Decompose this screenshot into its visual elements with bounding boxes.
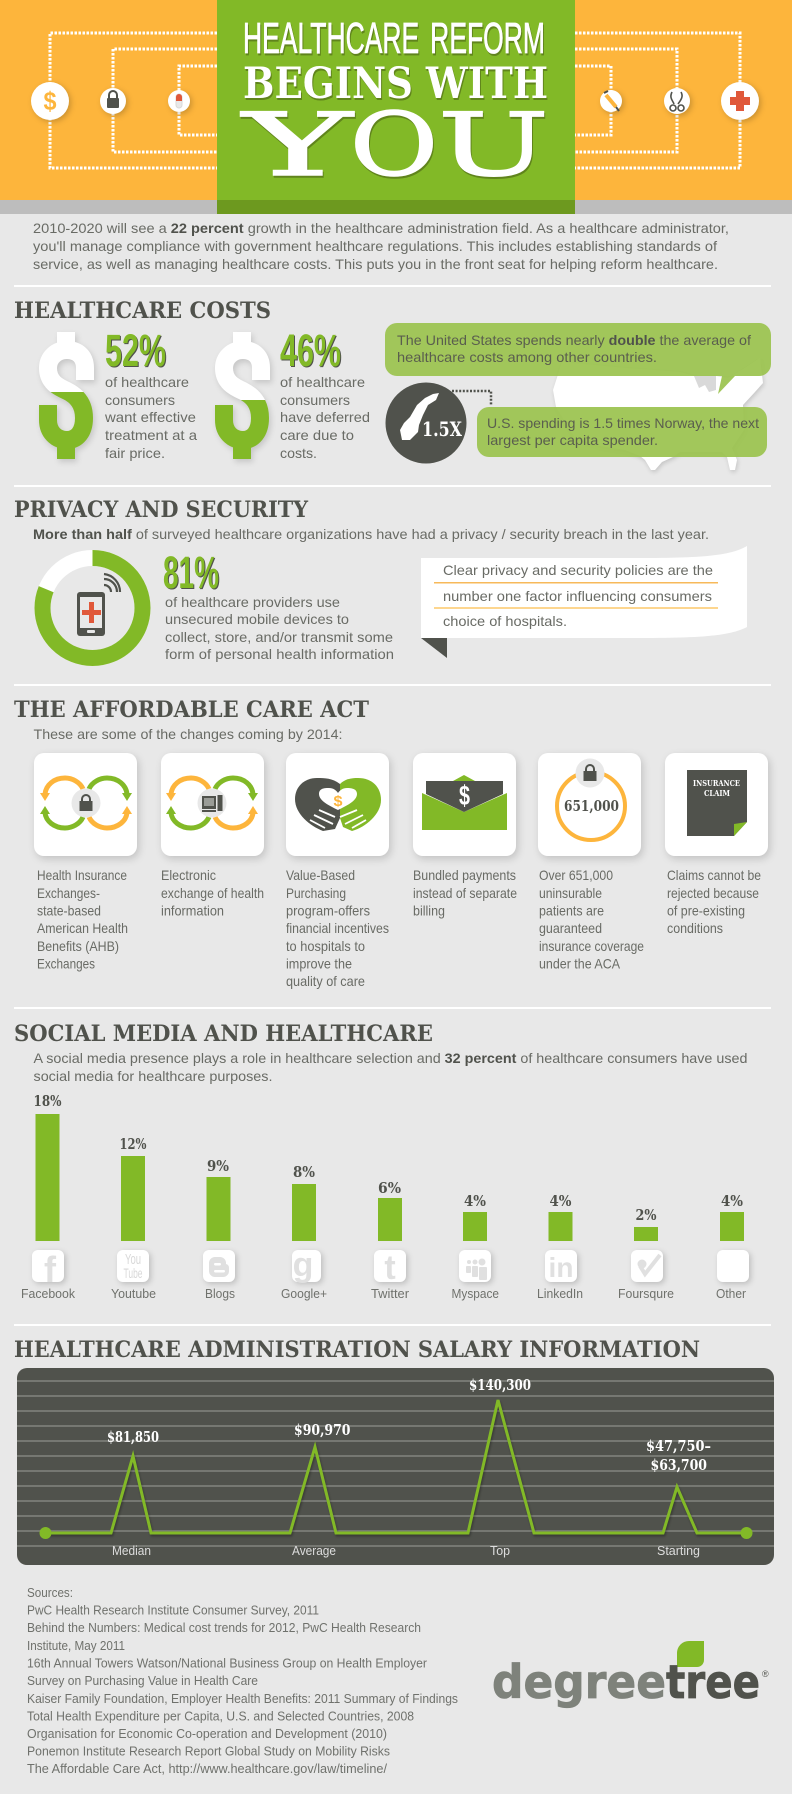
bar chart: social media use: 6% [378, 1179, 401, 1197]
card: health insurance exchanges: Benefits (AHB) [37, 938, 119, 954]
card: electronic exchange: information [161, 902, 224, 918]
card: health insurance exchanges: state-based [37, 902, 101, 918]
icon: facebook: Facebook [21, 1287, 76, 1301]
card: value-based purchasing: improve the [286, 956, 352, 972]
icon: youtube [111, 1250, 156, 1301]
logo: degreetree: ® [762, 1669, 769, 1679]
icon: google plus: Google+ [281, 1287, 327, 1301]
icon: facebook: f [44, 1249, 57, 1290]
icon: lock pin [100, 88, 126, 114]
line chart: salary: Starting [657, 1544, 700, 1558]
title [241, 14, 549, 196]
stat: 52 percent: treatment at a [105, 427, 197, 443]
sources: Institute, May 2011 [27, 1639, 125, 1653]
card: insurance claim: Claims cannot be [667, 867, 761, 883]
intro paragraph: 2010-2020 will see a 22 percent growth in the healthcare administration field. As a healthcare administrator, [33, 220, 729, 236]
heading: the affordable care act: THE AFFORDABLE CARE ACT [14, 697, 370, 723]
icon: norway 1.5x: 1.5X [422, 417, 462, 441]
stat: 81 percent [163, 547, 394, 662]
stat: 46 percent: 46% [280, 325, 341, 376]
sources: 16th Annual Towers Watson/National Business Group on Health Employer [27, 1656, 427, 1670]
intro paragraph: you'll manage compliance with government healthcare regulations. This includes establishing standards of [33, 238, 717, 254]
stat: 81 percent: of healthcare providers use [165, 594, 340, 610]
title: BEGINS WITH [243, 59, 548, 109]
stat: 46 percent: have deferred [280, 409, 370, 425]
card: 651,000 patients: insurance coverage [539, 938, 644, 954]
card: electronic exchange: exchange of health [161, 885, 264, 901]
dotted connector: norway [452, 391, 491, 405]
title: HEALTHCARE REFORM [243, 14, 545, 63]
title: O [350, 94, 438, 196]
intro paragraph: service, as well as managing healthcare costs. This puts you in the front seat for helping reform healthcare. [33, 256, 718, 272]
icon: syringe pin [600, 90, 622, 112]
card: electronic exchange: Electronic [161, 867, 216, 883]
ribbon callout: Clear privacy and security policies are the [443, 562, 713, 578]
icon: medical cross pin [721, 82, 759, 120]
callout: norway: largest per capita spender. [487, 432, 658, 448]
icon: myspace [452, 1250, 499, 1301]
icon: google plus: g [293, 1246, 313, 1284]
card: insurance claim: CLAIM [704, 788, 730, 798]
bar chart: social media use: 8% [293, 1163, 315, 1181]
callout: double the average: The United States spends nearly double the average of [397, 332, 751, 348]
heading: salary information: HEALTHCARE ADMINISTRATION SALARY INFORMATION [14, 1337, 700, 1363]
icon: twitter: Twitter [371, 1287, 409, 1301]
stat: 52 percent [104, 325, 197, 461]
card: bundled payments: Bundled payments [413, 867, 516, 883]
logo: degreetree: tree [666, 1655, 760, 1709]
ribbon callout: number one factor influencing consumers [443, 588, 712, 604]
intro paragraph [33, 220, 729, 272]
icon: youtube: Tube [124, 1265, 143, 1281]
icon: youtube: Youtube [111, 1287, 156, 1301]
heading: healthcare costs: HEALTHCARE COSTS [14, 298, 271, 324]
sources: The Affordable Care Act, http://www.healthcare.gov/law/timeline/ [27, 1762, 388, 1776]
card: insurance claim: conditions [667, 920, 723, 936]
card: 651,000 patients: uninsurable [539, 885, 602, 901]
stat: 52 percent: of healthcare [105, 374, 189, 390]
icon: norway 1.5x [386, 382, 466, 464]
card: 651,000 patients: guaranteed [539, 920, 602, 936]
dotted connector lines [50, 33, 740, 168]
card: health insurance exchanges: Exchanges [37, 956, 95, 972]
card: value-based purchasing: to hospitals to [286, 938, 365, 954]
stat: 81 percent: collect, store, and/or transmit some [165, 629, 393, 645]
icon: other: Other [716, 1287, 746, 1301]
social media intro: social media for healthcare purposes. [34, 1068, 272, 1084]
card: value-based purchasing: program-offers [286, 902, 370, 918]
card: health insurance exchanges: American Health [37, 920, 128, 936]
ribbon callout [421, 546, 747, 658]
card: 651,000 patients: under the ACA [539, 956, 621, 972]
stat: 46 percent: consumers [280, 392, 350, 408]
card: bundled payments: billing [413, 902, 445, 918]
icon: foursquare [618, 1250, 674, 1301]
icon: foursquare: Foursqure [618, 1287, 674, 1301]
stat: 46 percent: of healthcare [280, 374, 365, 390]
icon: myspace: Myspace [452, 1287, 499, 1301]
icon: facebook [21, 1249, 76, 1301]
card: 651,000 patients [538, 753, 644, 972]
logo: degreetree: degree [492, 1655, 666, 1709]
card: health insurance exchanges: Health Insurance [37, 867, 127, 883]
card: health insurance exchanges: Exchanges- [37, 885, 100, 901]
icon: dollar 52 percent [48, 332, 85, 459]
sources: Ponemon Institute Research Report Global Study on Mobility Risks [27, 1744, 390, 1758]
stat: 46 percent [280, 325, 370, 461]
callout: norway: U.S. spending is 1.5 times Norway, the next [487, 415, 759, 431]
card: insurance claim [665, 753, 768, 936]
line chart: salary: $63,700 [650, 1456, 707, 1474]
icon: linkedin: in [549, 1252, 573, 1283]
icon: youtube: You [125, 1251, 141, 1268]
icon: twitter: t [384, 1249, 396, 1287]
card: value-based purchasing: Purchasing [286, 885, 346, 901]
card: 651,000 patients: patients are [539, 902, 604, 918]
card: insurance claim: rejected because [667, 885, 759, 901]
bar chart: social media use [34, 1092, 744, 1241]
line chart: salary: $90,970 [294, 1421, 350, 1439]
card: health insurance exchanges [34, 753, 137, 972]
icon: twitter [371, 1249, 409, 1301]
sources: Total Health Expenditure per Capita, U.S. and Selected Countries, 2008 [27, 1710, 414, 1724]
card: value-based purchasing [286, 753, 389, 989]
bar chart: social media use: 18% [34, 1092, 62, 1110]
stat: 81 percent: form of personal health information [165, 646, 394, 662]
sources: Kaiser Family Foundation, Employer Health Benefits: 2011 Summary of Findings [27, 1692, 458, 1706]
stat: 52 percent: 52% [105, 325, 166, 376]
aca intro: These are some of the changes coming by 2014: [34, 726, 342, 742]
icon: mobile device [77, 574, 120, 636]
logo: degreetree [492, 1641, 769, 1709]
icon: dollar pin [31, 82, 69, 120]
stat: 46 percent: costs. [280, 445, 317, 461]
card: 651,000 patients: Over 651,000 [539, 867, 613, 883]
line chart: salary [17, 1368, 774, 1565]
ribbon callout: choice of hospitals. [443, 613, 567, 629]
card: value-based purchasing: quality of care [286, 973, 365, 989]
icon: other [716, 1250, 749, 1301]
icon: blogger: Blogs [205, 1287, 235, 1301]
title: Y [241, 94, 355, 196]
bar chart: social media use: 9% [207, 1157, 229, 1175]
callout: double the average [385, 323, 771, 394]
map: united states [553, 358, 763, 470]
donut chart: 81 percent [42, 558, 142, 658]
icon: linkedin [537, 1250, 583, 1301]
card: insurance claim: INSURANCE [693, 778, 740, 788]
header banner [0, 0, 792, 214]
line chart: salary: $81,850 [107, 1428, 159, 1446]
line chart: salary: Average [292, 1544, 336, 1558]
card: bundled payments: $ [459, 780, 470, 811]
line chart: salary: $47,750– [646, 1437, 711, 1455]
social media intro [34, 1050, 748, 1084]
card: insurance claim: of pre-existing [667, 902, 745, 918]
sources: PwC Health Research Institute Consumer Survey, 2011 [27, 1604, 319, 1618]
card: electronic exchange [161, 753, 264, 918]
callout: norway [477, 407, 767, 457]
sources: Behind the Numbers: Medical cost trends for 2012, PwC Health Research [27, 1621, 421, 1635]
bar chart: social media use: 4% [721, 1192, 743, 1210]
heading: social media and healthcare: SOCIAL MEDIA AND HEALTHCARE [14, 1021, 433, 1047]
bar chart: social media use: 12% [120, 1135, 146, 1153]
privacy summary: More than half of surveyed healthcare organizations have had a privacy / security breach in the last year. [33, 526, 709, 542]
line chart: salary: Top [490, 1544, 510, 1558]
stat: 52 percent: fair price. [105, 445, 165, 461]
card: value-based purchasing: Value-Based [286, 867, 355, 883]
card: bundled payments: instead of separate [413, 885, 517, 901]
icon: pill pin [168, 90, 190, 112]
icon: dollar pin: $ [44, 86, 57, 116]
heading: privacy and security: PRIVACY AND SECURITY [14, 497, 308, 523]
bar chart: social media use: 2% [636, 1206, 656, 1224]
line chart: salary: Median [112, 1544, 151, 1558]
icon: dollar 46 percent [224, 332, 261, 459]
icon: google plus [281, 1246, 327, 1301]
social media intro: A social media presence plays a role in healthcare selection and 32 percent of healthcare consumers have used [34, 1050, 748, 1066]
bar chart: social media use: 4% [550, 1192, 572, 1210]
stat: 52 percent: consumers [105, 392, 175, 408]
sources: Organisation for Economic Co-operation and Development (2010) [27, 1727, 387, 1741]
card: value-based purchasing: $ [334, 793, 343, 810]
sources: Survey on Purchasing Value in Health Care [27, 1674, 258, 1688]
title: U [438, 94, 549, 196]
stat: 81 percent: unsecured mobile devices to [165, 611, 349, 627]
card: bundled payments [413, 753, 517, 918]
callout: double the average: healthcare costs among other countries. [397, 349, 657, 365]
sources [27, 1586, 458, 1776]
stat: 81 percent: 81% [163, 547, 219, 598]
icon: blogger [203, 1250, 235, 1301]
sources: Sources: [27, 1586, 73, 1600]
line chart: salary: $140,300 [469, 1376, 531, 1394]
bar chart: social media use: 4% [464, 1192, 486, 1210]
stat: 46 percent: care due to [280, 427, 354, 443]
card: value-based purchasing: financial incentives [286, 920, 389, 936]
icon: linkedin: LinkedIn [537, 1287, 583, 1301]
stat: 52 percent: want effective [104, 409, 196, 425]
card: 651,000 patients: 651,000 [564, 797, 619, 815]
icon: stethoscope pin [664, 88, 690, 114]
